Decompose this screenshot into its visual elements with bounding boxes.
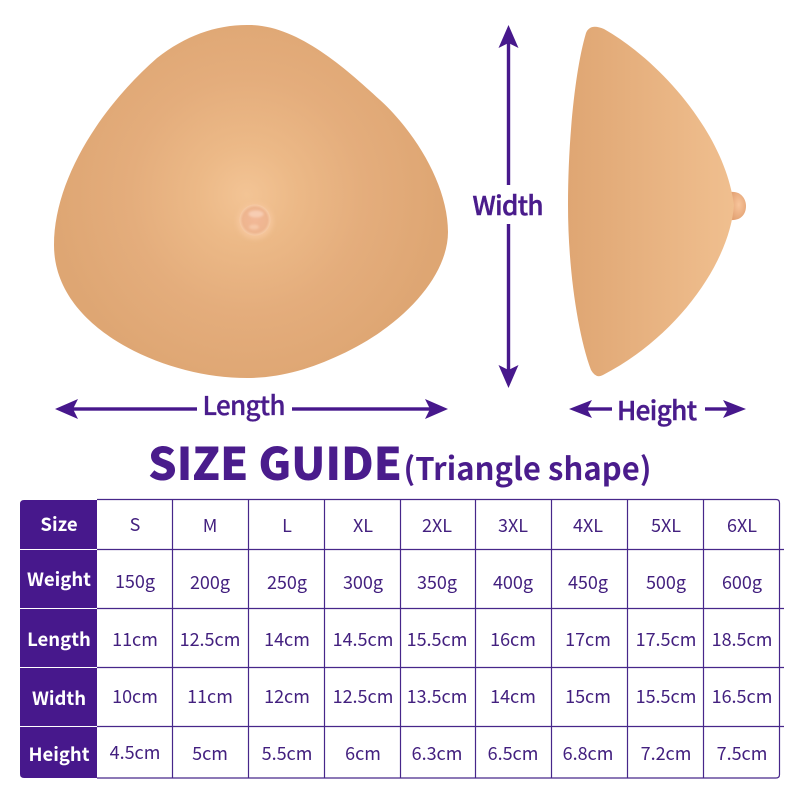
row: length: 15.5cm — [407, 626, 467, 652]
row: height: 5.5cm — [262, 740, 312, 766]
row: width: 12.5cm — [333, 683, 393, 709]
row: weight — [115, 568, 762, 595]
size table — [20, 500, 784, 778]
row: width — [112, 683, 772, 709]
row: height: 7.5cm — [717, 740, 767, 766]
row: length — [112, 626, 772, 652]
row: size: S — [130, 511, 140, 537]
row: width: 10cm — [112, 683, 158, 709]
row: height: 7.2cm — [641, 740, 691, 766]
row: weight: 600g — [722, 569, 762, 595]
front view of breast form — [54, 25, 448, 378]
row: width: 11cm — [187, 683, 233, 709]
table header column: Length — [27, 626, 91, 652]
table header column — [20, 500, 97, 778]
row: width: 15.5cm — [636, 683, 696, 709]
length arrow — [55, 399, 448, 419]
row: height: 6.3cm — [412, 740, 462, 766]
row: size: 3XL — [498, 512, 528, 538]
label: Height: Height — [617, 391, 697, 428]
row: weight: 200g — [190, 569, 230, 595]
row: height — [110, 739, 767, 766]
row: length: 18.5cm — [712, 626, 772, 652]
row: weight: 350g — [417, 569, 457, 595]
row: size: 6XL — [727, 512, 757, 538]
row: length: 11cm — [112, 626, 158, 652]
row: size: M — [203, 512, 217, 538]
row: height: 4.5cm — [110, 739, 160, 765]
row: size — [130, 511, 757, 538]
row: weight: 150g — [115, 568, 155, 594]
table header column: Width — [32, 685, 86, 711]
side view of breast form — [568, 27, 746, 376]
row: weight: 500g — [646, 569, 686, 595]
row: size: 5XL — [651, 512, 681, 538]
row: length: 12.5cm — [180, 626, 240, 652]
row: height: 5cm — [192, 740, 228, 766]
row: length: 14cm — [264, 626, 310, 652]
width arrow — [498, 25, 518, 388]
table grid — [97, 500, 784, 778]
row: size: 4XL — [573, 512, 603, 538]
height arrow — [569, 400, 746, 418]
row: length: 16cm — [490, 626, 536, 652]
row: length: 17.5cm — [636, 626, 696, 652]
label: Length: Length — [202, 386, 286, 423]
row: height: 6.5cm — [488, 740, 538, 766]
row: size: XL — [353, 512, 373, 538]
row: length: 17cm — [565, 626, 611, 652]
subtitle: (Triangle shape) — [404, 444, 652, 489]
row: size: 2XL — [422, 512, 452, 538]
row: size: L — [282, 512, 292, 538]
title: SIZE GUIDE — [148, 428, 402, 493]
row: height: 6.8cm — [563, 740, 613, 766]
row: length: 14.5cm — [333, 626, 393, 652]
row: weight: 400g — [493, 569, 533, 595]
table header column: Height — [28, 741, 90, 767]
row: width: 12cm — [264, 683, 310, 709]
label: Width: Width — [472, 186, 544, 223]
row: width: 13.5cm — [407, 683, 467, 709]
row: width: 14cm — [490, 683, 536, 709]
row: width: 16.5cm — [712, 683, 772, 709]
row: weight: 250g — [267, 569, 307, 595]
row: width: 15cm — [565, 683, 611, 709]
row: weight: 450g — [568, 569, 608, 595]
icon: nipple side — [730, 192, 746, 220]
row: weight: 300g — [343, 569, 383, 595]
table header column: Size — [40, 511, 78, 537]
icon: nipple front — [237, 203, 273, 239]
table header column: Weight — [27, 566, 91, 592]
row: height: 6cm — [345, 740, 381, 766]
